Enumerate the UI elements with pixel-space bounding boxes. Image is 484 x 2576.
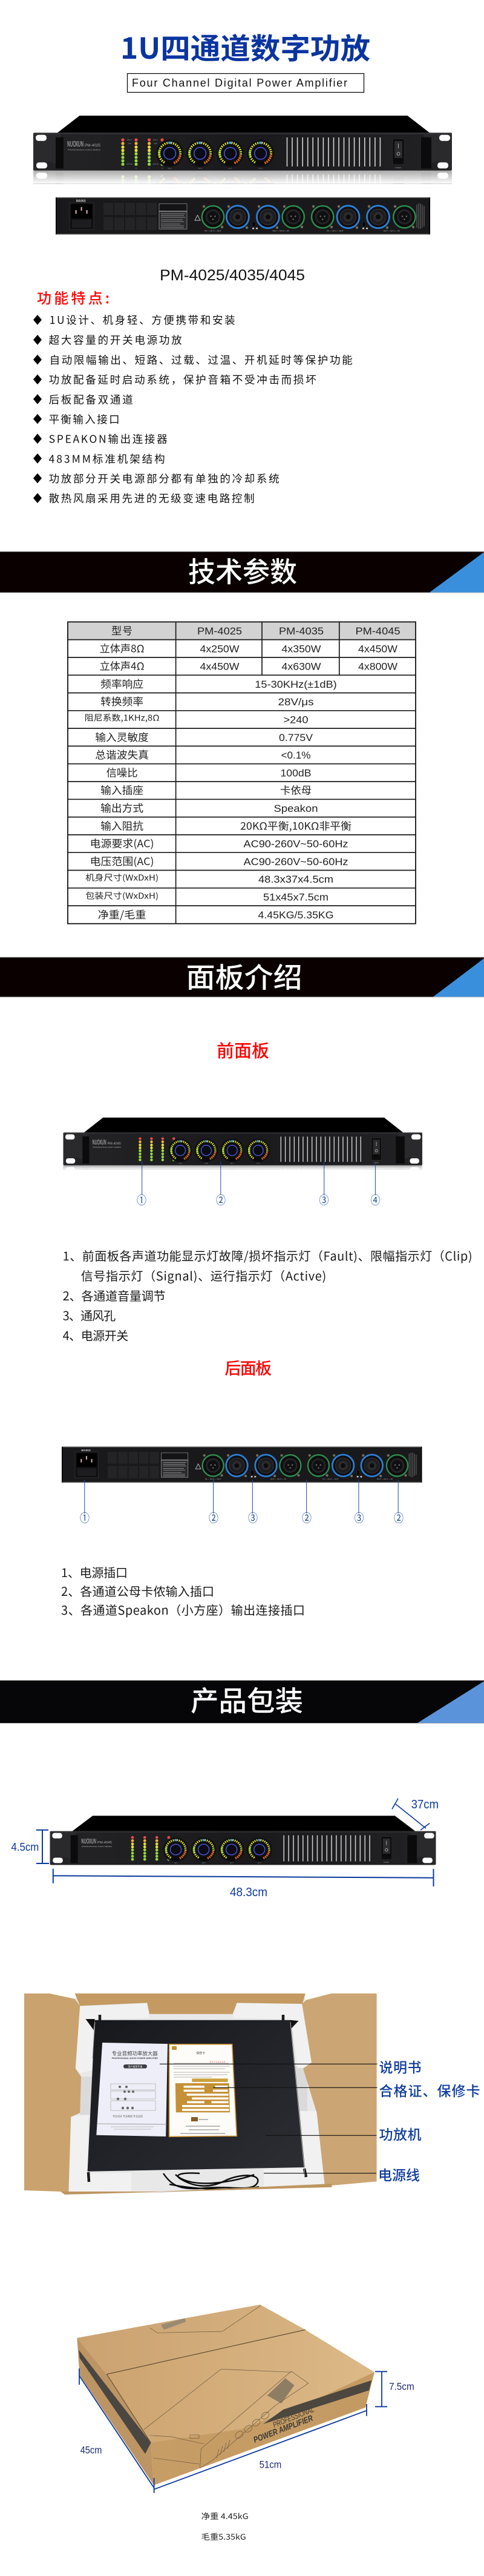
feature list: 483MM标准机架结构 xyxy=(49,451,165,466)
table values: 28V/μs xyxy=(278,696,313,708)
hero front amplifier: CH A xyxy=(168,167,172,170)
hero front amplifier: PROFESSIONAL AUDIO SERIES xyxy=(68,149,100,151)
front panel amplifier: PM-4045 xyxy=(107,1142,121,1145)
rear panel callouts: ② xyxy=(302,1509,312,1526)
rear panel description xyxy=(61,1563,305,1618)
left flap xyxy=(24,1994,81,2192)
table values: 20KΩ平衡,10KΩ非平衡 xyxy=(240,817,352,832)
feature list: 平衡输入接口 xyxy=(49,412,120,427)
table header row: PM-4045 xyxy=(356,625,401,637)
table row labels: 电压范围(AC) xyxy=(90,853,154,868)
features heading: 功能特点: xyxy=(37,286,110,308)
hero rear panel: OUT — CH 3 — IN xyxy=(272,230,289,232)
table values: 卡依母 xyxy=(280,782,312,797)
title: 1U四通道数字功放 xyxy=(120,25,370,67)
user manual: PROFESSIONAL AUDIO POWER AMPLIFIER xyxy=(112,2057,158,2060)
dimensioned amplifier xyxy=(50,1816,436,1865)
rear panel: OUT — CH 1 — IN xyxy=(377,1478,393,1480)
dimensioned amplifier: CH C xyxy=(230,1862,234,1864)
rear panel: OUT — CH 3 — IN xyxy=(270,1478,286,1480)
packaging callout labels: 功放机 xyxy=(379,2123,421,2144)
dimension: depth 37cm xyxy=(392,1798,439,1830)
box back flap xyxy=(77,2305,306,2374)
table values: 4x630W xyxy=(282,661,321,673)
table values: 15-30KHz(±1dB) xyxy=(255,679,337,690)
rear panel description: 2、各通道公母卡侬输入插口 xyxy=(61,1582,214,1599)
warranty card: 90715133 xyxy=(210,2060,226,2063)
front panel amplifier: CH D xyxy=(257,1164,260,1165)
table header row: PM-4025 xyxy=(197,625,242,637)
hero front amplifier: ACTIVE xyxy=(152,163,159,165)
user manual: 用户使用手册 xyxy=(128,2064,143,2069)
closed packaging box: POWER AMPLIFIER xyxy=(252,2413,315,2445)
hero front amplifier: POWER xyxy=(395,166,401,169)
front panel amplifier: POWER xyxy=(373,1163,379,1164)
box dimensions: 51cm xyxy=(260,2459,281,2471)
front panel amplifier: PROFESSIONAL AUDIO SERIES xyxy=(93,1146,121,1148)
section band: tech specs xyxy=(0,550,484,593)
dimension: width 48.3cm xyxy=(53,1869,434,1899)
table row labels: 输入阻抗 xyxy=(100,817,143,832)
closed packaging box: PROFESSIONAL xyxy=(272,2405,315,2429)
open packaging box photo xyxy=(24,1994,378,2195)
front panel description: 4、电源开关 xyxy=(63,1326,128,1344)
foam shaded strips xyxy=(80,2066,307,2115)
table row labels: 电源要求(AC) xyxy=(90,835,154,851)
feature list: 功放配备延时启动系统，保护音箱不受冲击而损坏 xyxy=(49,372,316,387)
box left face xyxy=(77,2338,154,2485)
table row labels: 转换频率 xyxy=(100,693,143,708)
warranty card: 保修卡 xyxy=(196,2051,205,2055)
back flap xyxy=(75,1994,306,2014)
weights: 净重 4.45kG xyxy=(201,2510,249,2522)
dimensioned amplifier: CH A xyxy=(174,1862,178,1864)
table row labels: 频率响应 xyxy=(100,676,143,691)
rear panel xyxy=(62,1447,422,1483)
dimension: height 4.5cm xyxy=(11,1830,49,1863)
rear panel callouts: ③ xyxy=(355,1509,364,1526)
table row labels: 输入插座 xyxy=(100,782,143,797)
table row labels: 阻尼系数,1KHz,8Ω xyxy=(85,711,160,723)
feature list: 自动限幅输出、短路、过载、过温、开机延时等保护功能 xyxy=(50,352,353,367)
front panel heading: 前面板 xyxy=(217,1037,269,1062)
dimensioned amplifier: PROFESSIONAL AUDIO SERIES xyxy=(82,1845,112,1848)
user manual: 专业音频功率放大器 xyxy=(112,2050,158,2057)
hero front amplifier: C xyxy=(149,167,150,170)
hero front amplifier: CH D xyxy=(258,167,263,170)
dimension: depth 37cm: 37cm xyxy=(411,1798,439,1811)
table values: 51x45x7.5cm xyxy=(263,891,329,903)
dimension: width 48.3cm: 48.3cm xyxy=(230,1886,267,1899)
table row labels: 包装尺寸(WxDxH) xyxy=(85,889,159,901)
feature list: SPEAKON输出连接器 xyxy=(49,432,168,447)
front panel callouts: ④ xyxy=(370,1191,380,1208)
front panel description: 2、各通道音量调节 xyxy=(63,1286,166,1304)
table row labels: 信噪比 xyxy=(106,764,138,779)
box front flap xyxy=(106,2330,374,2443)
rear panel description: 3、各通道Speakon（小方座）输出连接插口 xyxy=(61,1601,305,1618)
hero front amplifier: B xyxy=(136,167,137,170)
front panel callouts xyxy=(137,1161,380,1208)
table row labels: 立体声4Ω xyxy=(100,658,145,673)
foam base xyxy=(68,1998,325,2193)
hero front amplifier: CLIP xyxy=(128,142,131,145)
front panel callouts: ② xyxy=(216,1191,226,1208)
table values: 4x250W xyxy=(200,643,240,654)
dimension: height 4.5cm: 4.5cm xyxy=(11,1841,39,1853)
hero front amplifier: NUOXUN xyxy=(67,139,83,149)
feature list: 超大容量的开关电源功放 xyxy=(49,332,182,348)
section band: tech specs: 技术参数 xyxy=(188,550,297,590)
hero front amplifier: FAULT xyxy=(153,139,158,141)
hero front amplifier: CLIP xyxy=(154,142,157,145)
dimensioned amplifier: CH D xyxy=(258,1862,261,1864)
table row labels: 机身尺寸(WxDxH) xyxy=(85,871,159,883)
front panel amplifier: NUOXUN xyxy=(93,1137,106,1146)
hero front amplifier: PM-4025 xyxy=(85,143,100,148)
table row labels: 总谐波失真 xyxy=(95,746,149,762)
table values xyxy=(200,643,397,921)
table values: 4x450W xyxy=(200,661,240,673)
front panel description: 1、前面板各声道功能显示灯故障/损坏指示灯（Fault)、限幅指示灯（Clip) xyxy=(63,1247,473,1264)
subtitle box: Four Channel Digital Power Amplifier xyxy=(132,77,347,89)
front panel amplifier: CH B xyxy=(204,1164,208,1165)
dark strap on front face xyxy=(263,2380,371,2424)
box dimensions: 7.5cm xyxy=(389,2380,414,2392)
box dimensions xyxy=(79,2368,414,2493)
table values: 4x350W xyxy=(282,643,321,654)
section band: packaging xyxy=(0,1679,484,1724)
table header row xyxy=(111,622,401,637)
front box edge xyxy=(60,2184,332,2195)
feature list: 散热风扇采用先进的无级变速电路控制 xyxy=(49,491,255,506)
box dimensions: 45cm xyxy=(80,2445,102,2456)
hero rear panel: OUT — CH 1 — IN xyxy=(383,230,400,232)
model numbers: PM-4025/4035/4045 xyxy=(160,267,305,284)
weights: 毛重5.35kG xyxy=(201,2531,246,2542)
packaging callout labels: 合格证、保修卡 xyxy=(379,2080,480,2100)
printed amp sketch xyxy=(144,2305,309,2468)
hero front amplifier: ACTIVE xyxy=(126,163,132,165)
rear panel callouts: ① xyxy=(80,1509,90,1526)
subtitle box xyxy=(127,74,364,92)
rear panel callouts: ② xyxy=(394,1509,404,1526)
table values: 0.775V xyxy=(279,732,313,743)
table values: Speakon xyxy=(273,803,318,814)
packaging callout labels: 说明书 xyxy=(379,2056,421,2077)
table row labels: 净重/毛重 xyxy=(98,906,146,921)
hero rear panel: MAINS xyxy=(76,200,86,203)
hero front amplifier: D xyxy=(162,167,163,170)
table values: AC90-260V~50-60Hz xyxy=(243,856,348,868)
front panel description: 信号指示灯（Signal)、运行指示灯（Active) xyxy=(81,1267,326,1284)
dimensioned amplifier: NUOXUN xyxy=(81,1836,96,1846)
hero front amplifier: FAULT xyxy=(127,139,132,141)
closed packaging box xyxy=(77,2305,374,2485)
table values: AC90-260V~50-60Hz xyxy=(243,838,348,850)
box front face xyxy=(151,2372,374,2485)
right flap xyxy=(302,1994,377,2186)
packaging callout labels: 电源线 xyxy=(378,2164,420,2184)
warranty card xyxy=(169,2044,237,2136)
feature list xyxy=(33,312,353,506)
feature list: 后板配备双通道 xyxy=(49,392,133,407)
table header row: 型号 xyxy=(111,622,132,637)
user manual xyxy=(96,2043,168,2136)
rear panel heading: 后面板 xyxy=(224,1356,272,1379)
rear panel description: 1、电源插口 xyxy=(61,1563,128,1581)
foam corner blocks xyxy=(69,2003,325,2192)
hero front amplifier: CH B xyxy=(198,167,202,170)
rear panel: IN — CH 4 — OUT xyxy=(205,1478,221,1480)
dimensioned amplifier: CH B xyxy=(202,1862,206,1864)
section band: panel intro: 面板介绍 xyxy=(186,956,302,996)
table values: 4.45KG/5.35KG xyxy=(258,909,334,921)
callout leader lines xyxy=(160,2064,378,2173)
rear panel callouts xyxy=(80,1480,404,1526)
weights xyxy=(201,2510,249,2542)
feature list: 1U设计、机身轻、方便携带和安装 xyxy=(50,312,235,328)
hero rear panel: IN — CH 4 — OUT xyxy=(204,230,221,232)
front panel callouts: ③ xyxy=(319,1191,329,1208)
packaging callout labels xyxy=(378,2056,480,2184)
section band: packaging: 产品包装 xyxy=(191,1679,303,1719)
front panel amplifier xyxy=(63,1118,422,1170)
box side strap xyxy=(79,2350,151,2454)
dimensioned amplifier: PM-4045 xyxy=(97,1841,113,1845)
table values: 4x800W xyxy=(358,661,397,673)
power cord xyxy=(163,2173,259,2189)
rear panel callouts: ② xyxy=(209,1509,218,1526)
table row labels: 输出方式 xyxy=(100,800,143,815)
feature list: 功放部分开关电源部分都有单独的冷却系统 xyxy=(49,471,280,486)
dimensioned amplifier: POWER xyxy=(384,1862,389,1863)
user manual: 专业设计 专业制造 专业品质 xyxy=(113,2114,143,2118)
front panel description xyxy=(63,1247,473,1344)
table values: 4x450W xyxy=(358,643,397,654)
front panel amplifier: CH A xyxy=(178,1163,182,1165)
hero rear panel: IN — CH 2 — OUT xyxy=(327,230,344,232)
amplifier underside xyxy=(86,2015,306,2182)
spec table xyxy=(68,622,416,924)
front panel callouts: ① xyxy=(137,1191,146,1208)
rear panel: MAINS xyxy=(81,1449,91,1452)
front panel description: 3、通风孔 xyxy=(63,1306,116,1323)
hero front amplifier: A xyxy=(122,167,123,170)
front panel amplifier: CH C xyxy=(231,1164,234,1165)
table row labels xyxy=(85,640,160,921)
table header row: PM-4035 xyxy=(279,625,324,637)
rear panel: IN — CH 2 — OUT xyxy=(322,1478,339,1480)
hero front amplifier xyxy=(33,116,452,184)
table values: 48.3x37x4.5cm xyxy=(258,874,333,885)
section band: panel intro xyxy=(0,956,484,998)
table row labels: 输入灵敏度 xyxy=(95,729,149,744)
hero rear panel xyxy=(56,197,430,234)
table values: <0.1% xyxy=(281,749,311,761)
hero front amplifier: CH C xyxy=(228,167,232,170)
table values: 100dB xyxy=(281,767,311,779)
table row labels: 立体声8Ω xyxy=(100,640,145,655)
rear panel callouts: ③ xyxy=(248,1509,258,1526)
table values: >240 xyxy=(283,714,309,725)
